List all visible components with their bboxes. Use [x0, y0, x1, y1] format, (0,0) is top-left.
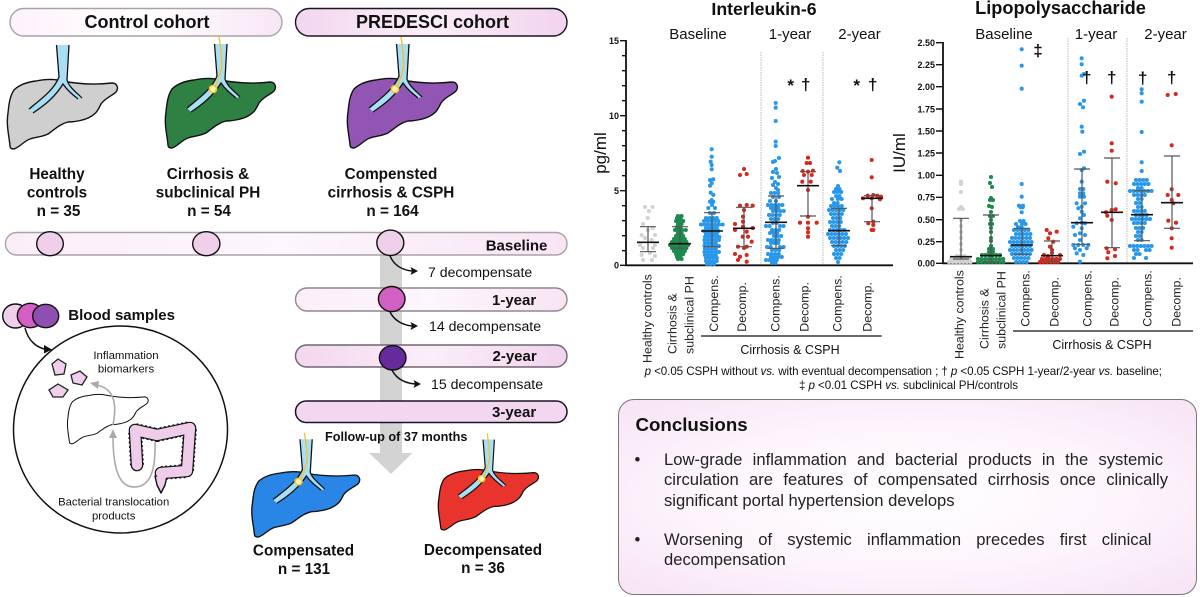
timeline bar: 1-year: [296, 288, 567, 311]
x axis labels: Decomp.: [735, 282, 749, 332]
x axis labels: [640, 274, 882, 363]
arrow and label: 14 decompensate: [390, 312, 541, 334]
axes: 0.25: [917, 237, 935, 247]
timeline bar: 3-year: 3-year: [492, 404, 536, 421]
label: decompensated n: n = 36: [461, 560, 505, 577]
icon: compensated cirrhosis liver purple: [347, 37, 457, 148]
axes: 0.00: [917, 259, 935, 269]
conclusion one text: [664, 450, 1168, 510]
dots: 1-year decompensated IL-6: [800, 158, 817, 237]
conclusion one text: Low-grade inflammation and bacterial products in the systemic: [664, 450, 1163, 468]
dots: 1-year decompensated LPS: [1106, 97, 1116, 258]
label: cirrhosis and subclinical PH: subclinical PH: [156, 184, 260, 202]
label: follow-up of 37 months: Follow-up of 37 months: [325, 430, 467, 444]
significance marks: †: [1107, 68, 1116, 87]
label: bacterial translocation products: products: [92, 510, 136, 522]
timepoint labels: [669, 26, 881, 43]
marker: CSPH baseline sample: [377, 230, 404, 256]
error bars and medians: [950, 156, 1183, 262]
arrow and label: 14 decompensate: 14 decompensate: [429, 318, 541, 334]
dots: 2-year compensated IL-6: [828, 162, 849, 262]
axes: 0: [614, 260, 619, 270]
x axis labels: Compens.: [830, 275, 844, 332]
significance marks: †: [868, 75, 877, 94]
timepoint labels: Baseline: [669, 26, 727, 43]
label: compensated n: n = 131: [278, 561, 331, 578]
arrow: follow-up time: [369, 255, 412, 474]
significance marks: †: [1082, 68, 1091, 87]
significance marks: [1033, 41, 1176, 88]
dots: subclinical LPS: [978, 177, 1005, 262]
timeline bar: baseline: [6, 232, 567, 255]
label: healthy controls: controls: [27, 184, 87, 202]
axes: 2.00: [917, 82, 935, 92]
axes: 15: [609, 36, 619, 46]
label: blood samples: Blood samples: [68, 307, 175, 324]
axes: 1.00: [917, 171, 935, 181]
marker: 1-year sample: [378, 286, 405, 312]
label: cirrhosis and subclinical PH: [156, 166, 260, 220]
timeline bar: 1-year: 1-year: [492, 292, 536, 309]
label: healthy controls: Healthy: [29, 166, 85, 183]
axes: [917, 38, 1193, 269]
timepoint labels: 2-year: [838, 26, 881, 43]
axes: 2.25: [917, 60, 935, 70]
error bars and medians: [637, 172, 883, 252]
x axis labels: Decomp.: [1170, 277, 1184, 327]
arrow: bacterial translocation to liver: [109, 429, 155, 487]
bullet two: •: [634, 530, 640, 549]
arrow and label: 7 decompensate: 7 decompensate: [428, 264, 532, 280]
x axis labels: Compens.: [768, 275, 782, 332]
timepoint labels: [975, 26, 1187, 43]
icon: healthy liver: [7, 45, 117, 149]
panel: conclusions: [618, 399, 1197, 595]
x axis labels: Compens.: [1140, 270, 1154, 327]
x axis labels: Cirrhosis & CSPH: [740, 343, 840, 357]
icon: blood sample tubes: [3, 303, 59, 328]
conclusion two text: [664, 530, 1152, 569]
x axis labels: Decomp.: [798, 282, 812, 332]
timepoint labels: Baseline: [975, 26, 1033, 43]
label: compensated cirrhosis and CSPH: [328, 166, 454, 220]
axes: 1.25: [917, 148, 935, 158]
significance marks: [787, 75, 877, 95]
heading: conclusions: Conclusions: [636, 414, 748, 434]
arrow and label: 15 decompensate: [392, 370, 543, 392]
x axis labels: Cirrhosis &: [666, 293, 680, 354]
timepoint labels: 2-year: [1144, 26, 1187, 43]
axes: 10: [609, 111, 619, 121]
label: compensated n: [253, 542, 354, 578]
x axis labels: Cirrhosis & CSPH: [1052, 338, 1152, 352]
arrow: blood to biomarkers: [25, 328, 52, 354]
axes: 5: [614, 186, 619, 196]
label: compensated cirrhosis and CSPH: Compensted: [345, 166, 437, 183]
axes: 2.50: [917, 38, 935, 48]
header: control cohort: [10, 8, 282, 36]
label: bacterial translocation products: [58, 496, 169, 522]
dots: baseline compensated LPS: [1010, 49, 1035, 262]
header: control cohort: Control cohort: [85, 12, 209, 32]
dots: healthy controls: [640, 207, 655, 260]
dots: baseline decompensated IL-6: [735, 169, 753, 262]
label: inflammation biomarkers: biomarkers: [98, 364, 154, 376]
dots: cirrhosis subclinical PH: [670, 216, 691, 259]
label: compensated cirrhosis and CSPH: cirrhosis & CSPH: [328, 184, 454, 202]
icon: decompensated liver red: [438, 433, 538, 530]
dots: baseline decompensated LPS: [1040, 230, 1063, 262]
header: PREDESCI cohort: [296, 8, 567, 36]
dots: baseline compensated IL-6: [701, 149, 723, 264]
timeline bar: 2-year: 2-year: [492, 348, 537, 365]
axes: 1.75: [917, 104, 935, 114]
dots: 2-year decompensated IL-6: [863, 160, 881, 230]
icon: inflammation biomarkers pentagons: [49, 359, 87, 397]
label: inflammation biomarkers: Inflammation: [93, 350, 159, 362]
dots: healthy controls LPS: [949, 182, 973, 262]
x axis labels: subclinical PH: [994, 271, 1008, 349]
significance marks: *: [787, 76, 794, 95]
x axis labels: Healthy controls: [640, 274, 654, 363]
dots: 2-year decompensated LPS: [1168, 94, 1178, 248]
x axis labels: Cirrhosis &: [978, 288, 992, 349]
dots: 1-year compensated IL-6: [766, 103, 785, 263]
timeline bar: 3-year: [296, 401, 567, 422]
x axis labels: Compens.: [707, 275, 721, 332]
significance marks: *: [853, 76, 860, 95]
significance marks: †: [1138, 68, 1147, 88]
arrow: liver to biomarkers: [90, 381, 115, 425]
label: decompensated n: Decompensated: [424, 542, 542, 559]
label: healthy controls: [27, 166, 87, 220]
significance marks: †: [801, 75, 810, 94]
panel: study design flow: [3, 8, 567, 578]
significance marks: †: [1167, 68, 1176, 87]
label: cirrhosis and subclinical PH: n = 54: [187, 203, 231, 220]
chart: interleukin-6: [591, 0, 893, 363]
label: bacterial translocation products: Bacterial translocation: [58, 496, 169, 508]
conclusion two text: Worsening of systemic inflammation precedes first clinical: [664, 530, 1152, 548]
icon: liver outline: [67, 394, 148, 444]
icon: colon: [135, 428, 190, 493]
dots: 2-year compensated LPS: [1130, 89, 1153, 258]
x axis labels: [952, 270, 1193, 359]
dots: 1-year compensated LPS: [1073, 58, 1088, 262]
axes: 0.50: [917, 215, 935, 225]
label: cirrhosis and subclinical PH: Cirrhosis &: [167, 166, 249, 183]
x axis labels: Decomp.: [1048, 277, 1062, 327]
arrow and label: 7 decompensate: [390, 256, 532, 280]
icon: compensated liver blue: [252, 433, 360, 537]
timepoint labels: 1-year: [1075, 26, 1117, 43]
arrow and label: 15 decompensate: 15 decompensate: [431, 376, 543, 392]
conclusion two text: decompensation: [664, 550, 786, 569]
label: compensated n: Compensated: [253, 542, 354, 560]
chart: lipopolysaccharide: [890, 0, 1193, 359]
timeline bar: 2-year: [296, 345, 567, 367]
timeline bar: baseline: Baseline: [486, 238, 547, 254]
y axis title: pg/ml: [591, 132, 610, 174]
marker: 2-year sample: [379, 346, 406, 370]
axes: 1.50: [917, 126, 935, 136]
header: PREDESCI cohort: PREDESCI cohort: [356, 12, 509, 32]
conclusion one text: circulation are features of compensated cirrhosis once clinically: [664, 470, 1168, 489]
marker: subclinical baseline sample: [193, 232, 220, 256]
footnote: statistics legend: ‡ p <0.01 CSPH vs. subclinical PH/controls: [799, 379, 1018, 392]
timepoint labels: 1-year: [769, 26, 811, 43]
label: healthy controls: n = 35: [37, 203, 81, 220]
x axis labels: Compens.: [1080, 270, 1094, 327]
footnote: statistics legend: p <0.05 CSPH without vs. with eventual decompensation ; † p <0.05 CSPH 1-year/2-year vs. baseline;: [644, 365, 1162, 378]
conclusion one text: significant portal hypertension develops: [664, 490, 955, 510]
label: decompensated n: [424, 542, 542, 577]
bullet one: •: [634, 450, 640, 469]
significance marks: ‡: [1033, 41, 1043, 60]
y axis title: IU/ml: [890, 133, 909, 173]
axes: 0.75: [917, 193, 935, 203]
footnote: statistics legend: [644, 365, 1162, 392]
label: inflammation biomarkers: [93, 350, 159, 376]
label: compensated cirrhosis and CSPH: n = 164: [366, 203, 419, 220]
x axis labels: subclinical PH: [682, 276, 696, 354]
x axis labels: Compens.: [1018, 270, 1032, 327]
x axis labels: Decomp.: [1108, 277, 1122, 327]
x axis labels: Healthy controls: [952, 270, 966, 359]
icon: cirrhosis liver green: [165, 37, 275, 148]
x axis labels: Decomp.: [860, 282, 874, 332]
axes: [609, 36, 893, 270]
marker: healthy baseline sample: [37, 232, 63, 256]
panel: gut-liver circle: [14, 326, 228, 533]
